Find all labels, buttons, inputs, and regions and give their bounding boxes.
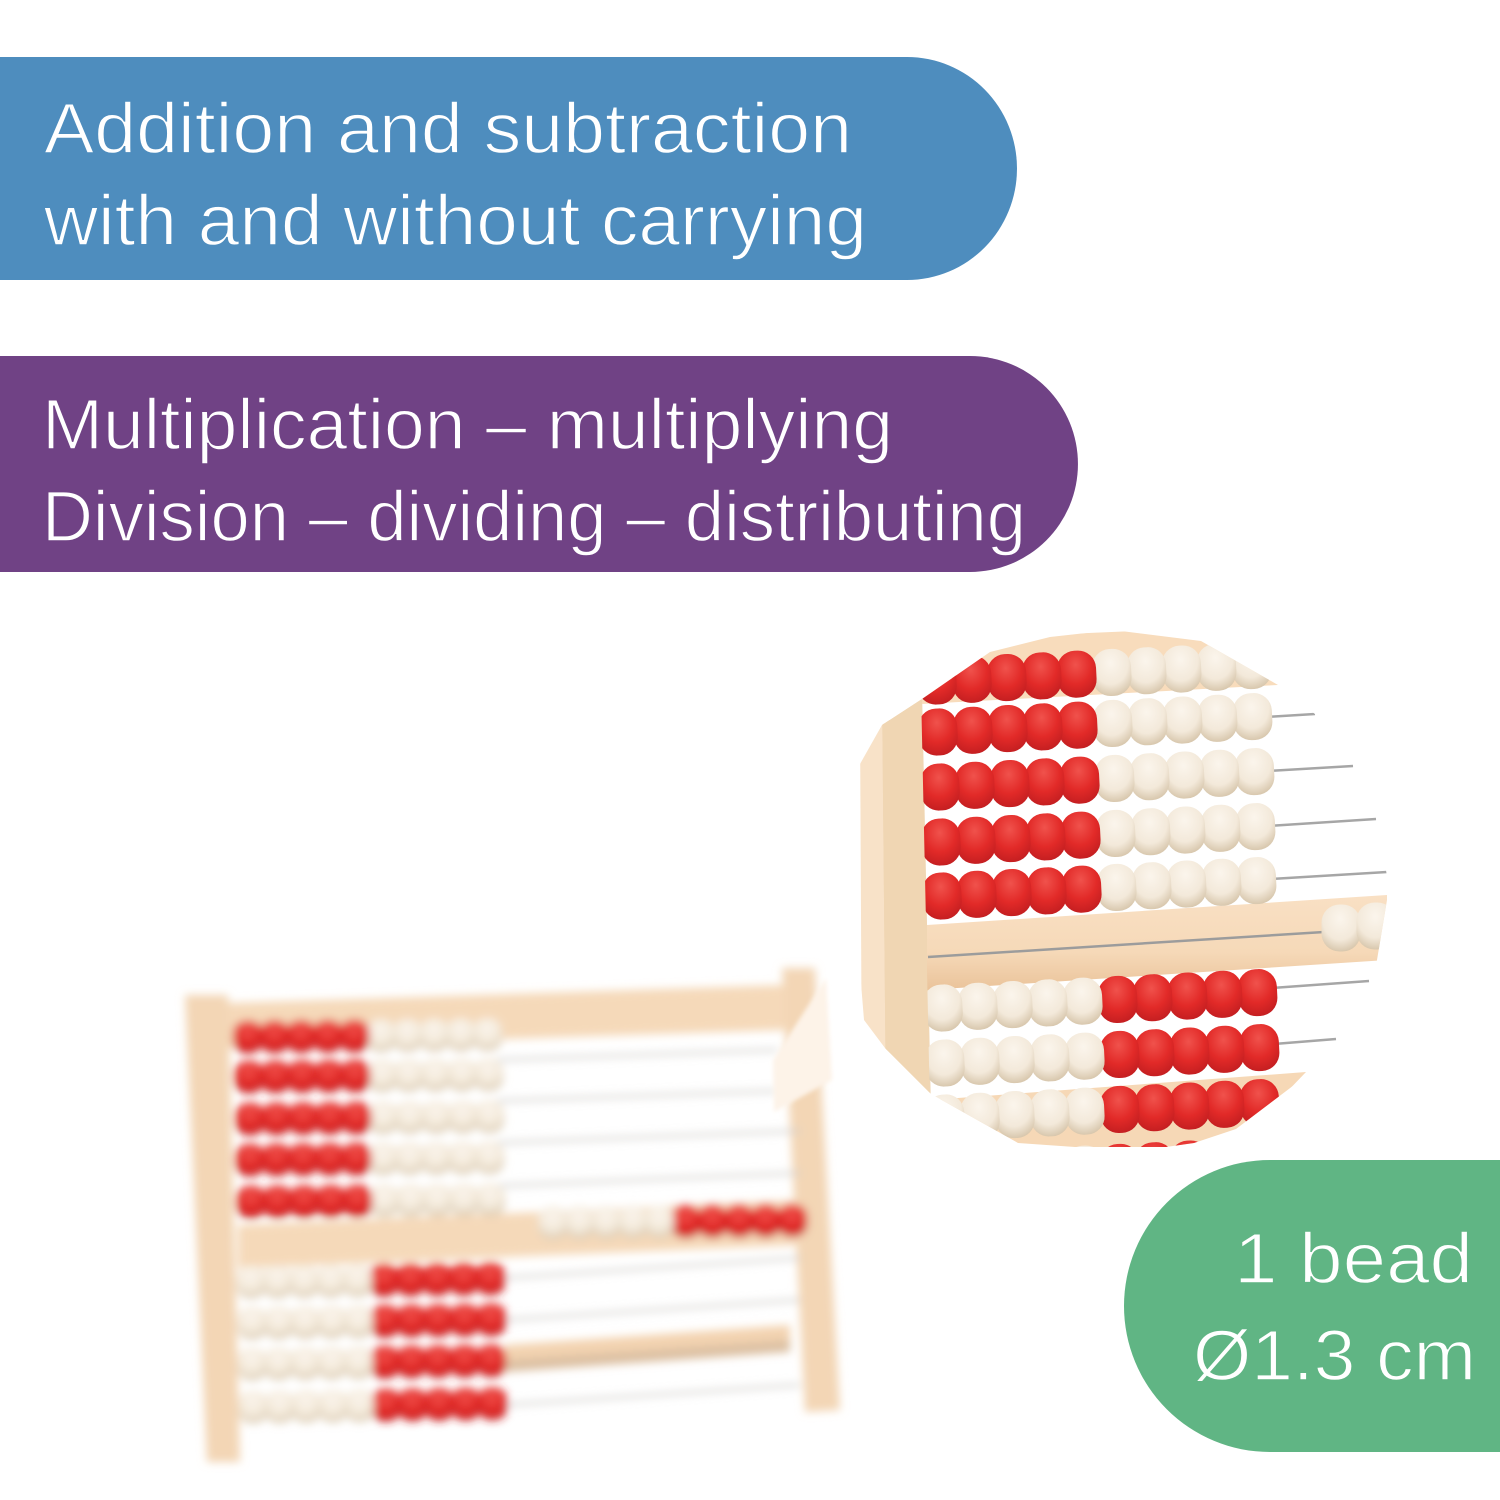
- detail: rods: [1265, 714, 1387, 1044]
- abacus front left post: [185, 995, 240, 1462]
- magnified bead detail: [860, 632, 1387, 1147]
- detail: middle rail: [927, 895, 1387, 990]
- abacus rods: [497, 1050, 800, 1405]
- detail: sliding white beads on middle rod: [1322, 902, 1386, 952]
- banner: multiplication and division: [0, 356, 1078, 572]
- blurred abacus photo: [185, 968, 840, 1462]
- heading line: division: Division – dividing – distributing: [42, 478, 1026, 557]
- heading line: multiplication: Multiplication – multiplying: [42, 386, 893, 465]
- badge text: 1 bead: 1 bead: [1234, 1220, 1473, 1299]
- detail: lower rail: [931, 1072, 1306, 1150]
- abacus middle rail: [238, 1200, 800, 1268]
- abacus lower rail shadow: [505, 1340, 790, 1372]
- abacus back right post: [782, 968, 840, 1412]
- abacus lower rail: [505, 1325, 790, 1360]
- badge: bead size: [1124, 1160, 1500, 1452]
- detail: outer frame strip: [860, 724, 886, 1048]
- detail: bead rows: [922, 646, 1280, 1147]
- banner: addition and subtraction: [0, 57, 1017, 280]
- detail: middle rod: [928, 932, 1324, 957]
- abacus top rail: [228, 985, 785, 1048]
- detail: top rail: [922, 625, 1278, 704]
- detail: post mask for bead left ends: [882, 690, 930, 1110]
- magnifier wedge: [773, 978, 832, 1112]
- abacus bead rows: [233, 1018, 807, 1424]
- badge text: diameter: Ø1.3 cm: [1193, 1317, 1476, 1396]
- detail: left post: [882, 690, 931, 1110]
- heading line: with and without carrying: with and without carrying: [43, 182, 867, 261]
- heading line: addition and subtraction: Addition and subtraction: [44, 90, 852, 169]
